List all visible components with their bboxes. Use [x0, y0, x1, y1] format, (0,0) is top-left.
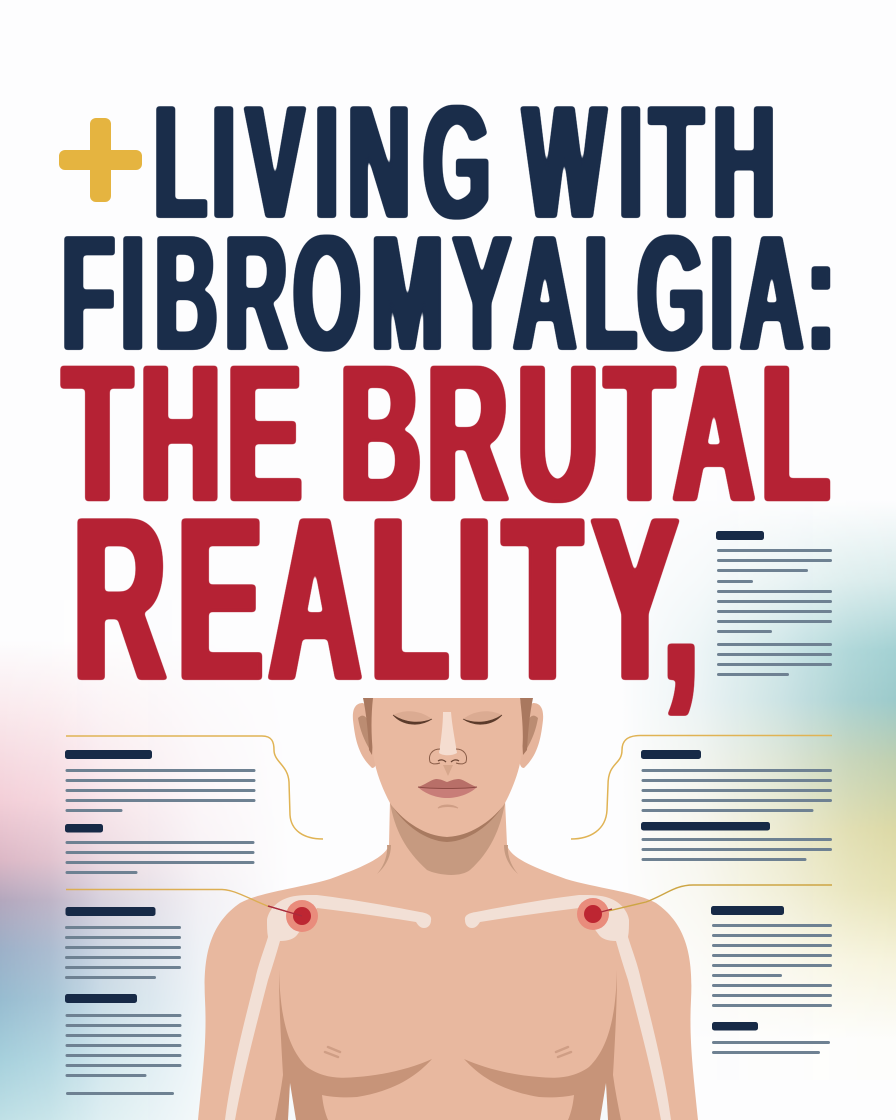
gaps between arms and torso	[288, 1083, 608, 1120]
ears	[353, 703, 543, 768]
text block: lower right 1	[711, 906, 832, 1007]
title line: living with: LIVING WITH	[154, 72, 775, 252]
text block: lower left 1	[65, 907, 181, 979]
lips	[418, 779, 477, 808]
background: soft colour washes	[0, 518, 896, 1120]
title	[62, 72, 835, 729]
callout connector: top left	[66, 736, 323, 839]
text block: lower right 2	[712, 1022, 830, 1054]
text block: upper right 1	[641, 750, 832, 812]
neck cords	[377, 845, 518, 874]
pain point: left shoulder	[268, 900, 318, 932]
text block: upper left 2	[65, 824, 254, 874]
callout connector: top right	[571, 736, 832, 839]
callout connector: right shoulder	[600, 885, 832, 913]
torso and neck	[198, 800, 698, 1120]
jaw shadow line	[392, 806, 503, 842]
left eye	[393, 711, 432, 724]
chest shadows	[275, 970, 621, 1120]
chest detail marks	[325, 1047, 571, 1057]
neck shadow	[390, 803, 505, 875]
title line: reality: REALITY,	[73, 470, 699, 729]
callout connector: left shoulder	[66, 890, 302, 916]
title line: fibromyalgia: FIBROMYALGIA:	[62, 202, 835, 384]
skeleton: collarbones and arm bones	[225, 895, 671, 1120]
text block: upper left 1	[65, 750, 256, 812]
right eye	[463, 711, 502, 724]
face	[372, 698, 523, 837]
text block: top right	[716, 531, 832, 676]
text block: lower left 2	[65, 994, 182, 1095]
text block: upper right 2	[641, 822, 832, 861]
icon: yellow plus	[59, 118, 142, 202]
body illustration	[198, 698, 698, 1120]
title line: the brutal: THE BRUTAL	[63, 324, 829, 542]
pain point: right shoulder	[577, 898, 612, 930]
hair at temples	[363, 698, 533, 755]
nose	[429, 712, 467, 776]
